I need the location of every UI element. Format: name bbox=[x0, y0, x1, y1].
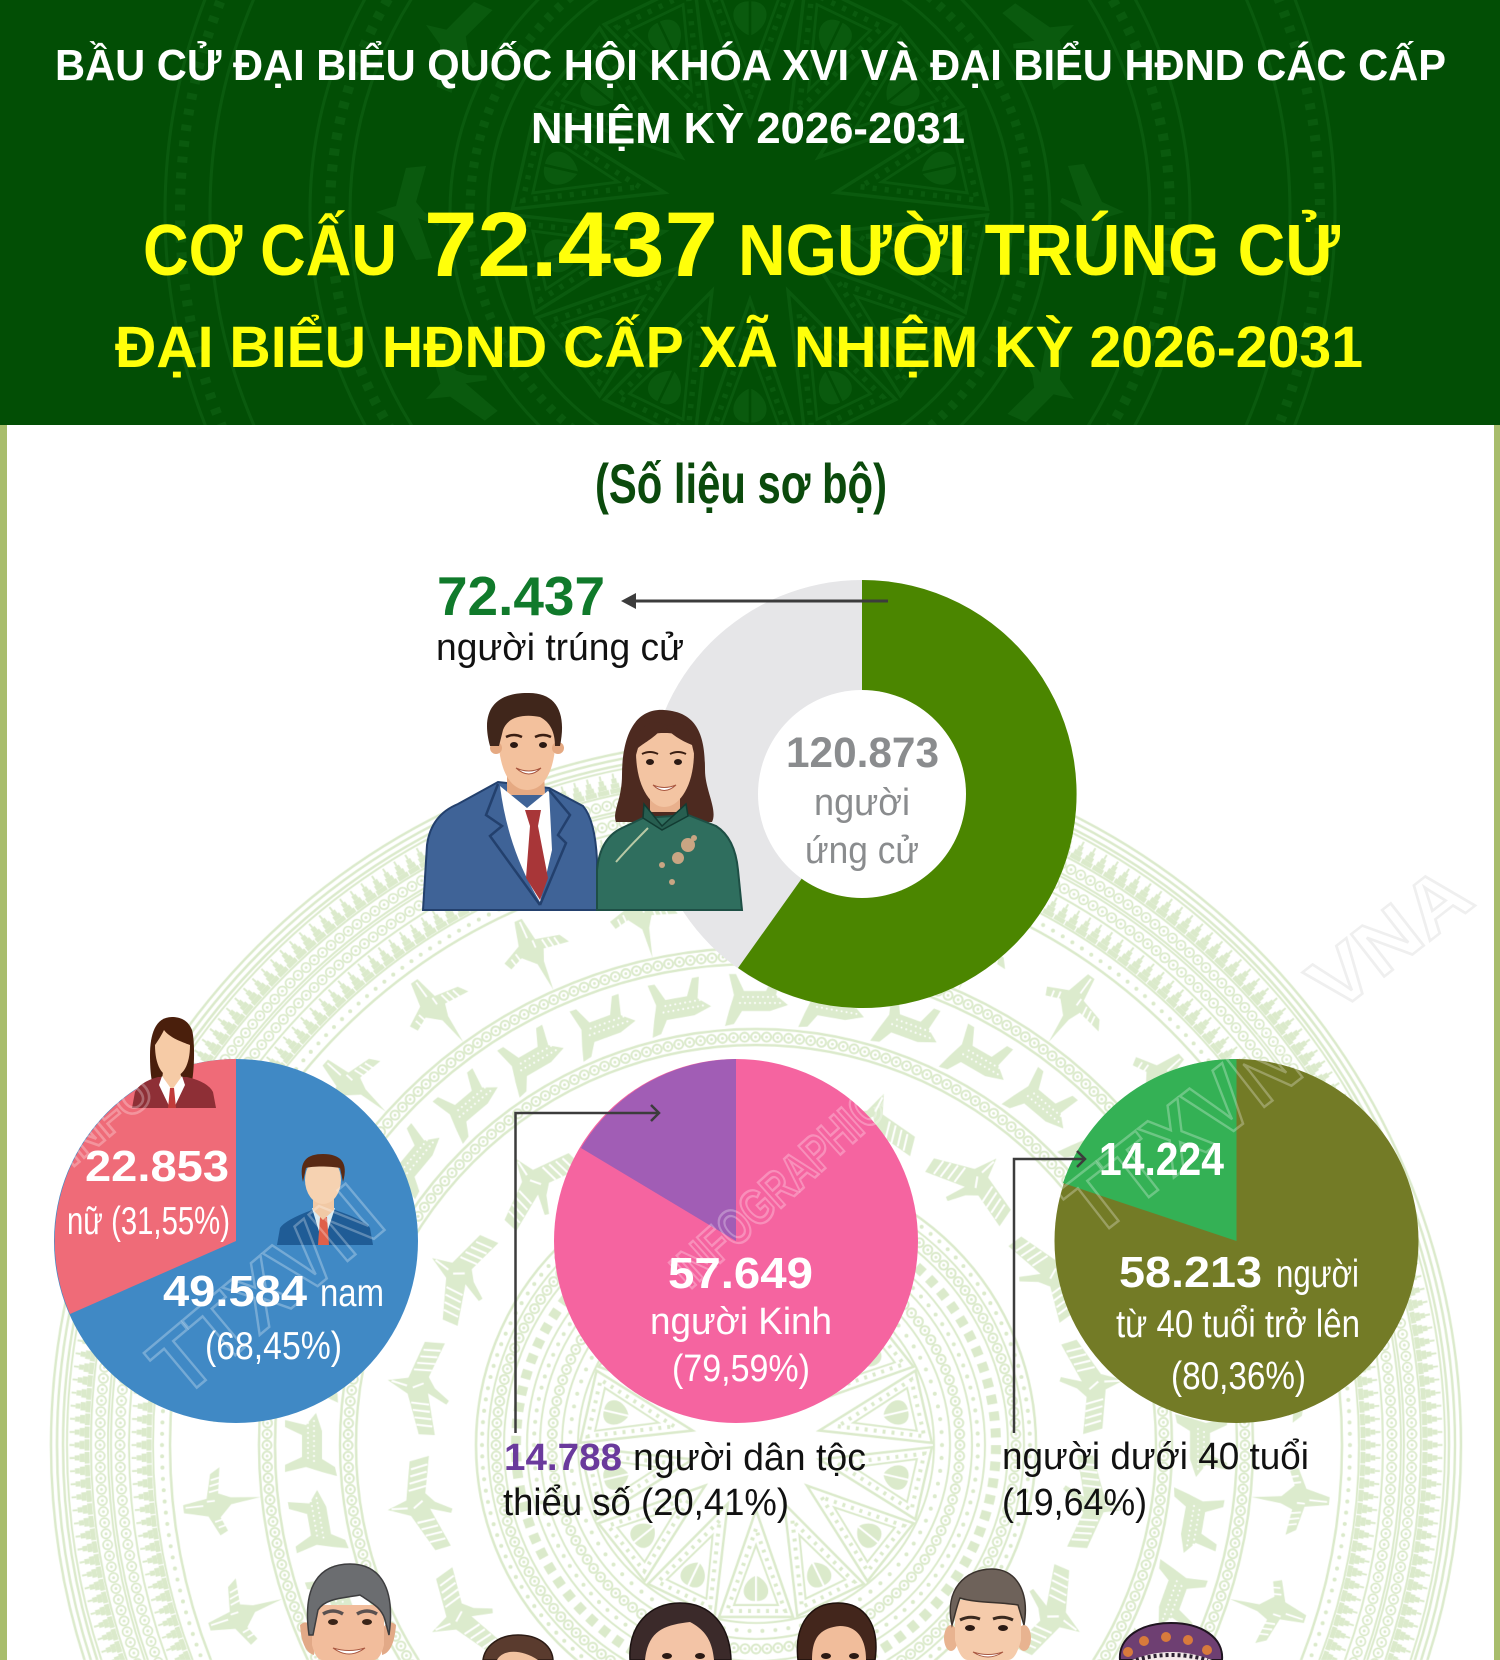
donut centre label: 120.873 bbox=[786, 729, 939, 777]
subtitle: preliminary data: (Số liệu sơ bộ) bbox=[595, 452, 887, 515]
watermarks: VNA bbox=[1291, 848, 1487, 1028]
title second line: ĐẠI BIỂU HĐND CẤP XÃ NHIỆM KỲ 2026-2031 bbox=[115, 315, 1363, 380]
title main line: 72.437 bbox=[424, 194, 718, 296]
callout text: under 40: (19,64%) bbox=[1002, 1482, 1147, 1524]
pie label: Kinh: (79,59%) bbox=[672, 1348, 810, 1390]
donut centre label: ứng cử bbox=[805, 830, 919, 872]
donut centre label bbox=[786, 729, 939, 872]
callout text: ethnic minority bbox=[503, 1437, 866, 1524]
title main line: NGƯỜI TRÚNG CỬ bbox=[738, 210, 1340, 291]
watermarks bbox=[47, 848, 1487, 1415]
callout text: under 40 bbox=[1002, 1436, 1309, 1524]
donut centre label: người bbox=[814, 782, 910, 824]
header panel bbox=[0, 0, 1500, 425]
icon: woman bbox=[132, 1017, 216, 1108]
pie label: 40 and over: người bbox=[1276, 1253, 1359, 1296]
watermarks: TTXVN bbox=[1045, 1011, 1318, 1255]
callout text: ethnic minority: 14.788 bbox=[504, 1437, 622, 1479]
title main line: CƠ CẤU bbox=[143, 210, 397, 291]
pie label: Kinh: 57.649 bbox=[668, 1249, 813, 1298]
older man bbox=[300, 1564, 396, 1660]
pie chart: ethnicity bbox=[554, 1059, 918, 1423]
pie chart: gender bbox=[54, 1017, 418, 1423]
label: 72,437 elected bbox=[436, 565, 684, 669]
young man bbox=[944, 1569, 1031, 1660]
header line 2: NHIỆM KỲ 2026-2031 bbox=[531, 103, 965, 153]
label: 72,437 elected: người trúng cử bbox=[436, 627, 684, 669]
woman left bbox=[483, 1635, 553, 1660]
pie label: under 40: 14.224 bbox=[1099, 1133, 1224, 1185]
pie label: women bbox=[67, 1142, 230, 1243]
pie label: women: nữ (31,55%) bbox=[67, 1200, 230, 1243]
background: bronze drum pattern bbox=[7, 425, 1494, 1660]
watermarks: INFOGRAPHICS bbox=[660, 1063, 913, 1298]
woman in ao dai bbox=[597, 710, 742, 910]
pie chart: age bbox=[1054, 1059, 1418, 1423]
pie label: 40 and over bbox=[1116, 1248, 1360, 1398]
callout text: under 40: người dưới 40 tuổi bbox=[1002, 1436, 1309, 1478]
ethnic woman with headdress bbox=[1120, 1623, 1222, 1660]
callout arrow: under 40 bbox=[1014, 1151, 1085, 1433]
pie label: men bbox=[163, 1267, 384, 1368]
woman centre bbox=[630, 1603, 731, 1660]
watermarks: TTXVN bbox=[131, 1165, 401, 1415]
icon: man bbox=[277, 1154, 373, 1245]
callout arrow: ethnic minority bbox=[516, 1105, 659, 1433]
man bbox=[423, 693, 597, 910]
watermarks: INFO bbox=[47, 1067, 163, 1176]
pie label: men: (68,45%) bbox=[205, 1325, 342, 1368]
illustration: elected man and woman bbox=[423, 693, 742, 910]
arrow: donut to elected label bbox=[621, 593, 888, 609]
pie label: men: 49.584 bbox=[163, 1267, 308, 1316]
pie label: women: 22.853 bbox=[85, 1142, 229, 1191]
pie label: men: nam bbox=[320, 1272, 384, 1315]
man centre bbox=[797, 1603, 876, 1660]
pie label: 40 and over: từ 40 tuổi trở lên bbox=[1116, 1303, 1360, 1346]
callout text: ethnic minority: người dân tộc bbox=[633, 1437, 866, 1479]
title main line bbox=[143, 194, 1340, 296]
side borders bbox=[0, 425, 1500, 1660]
pie label: Kinh bbox=[650, 1249, 832, 1390]
label: 72,437 elected: 72.437 bbox=[437, 565, 605, 627]
callout text: ethnic minority: thiểu số (20,41%) bbox=[503, 1482, 789, 1524]
pie label: 40 and over: 58.213 bbox=[1119, 1248, 1262, 1297]
pie label: Kinh: người Kinh bbox=[650, 1301, 832, 1343]
header line 1: BẦU CỬ ĐẠI BIỂU QUỐC HỘI KHÓA XVI VÀ ĐẠI BIỂU HĐND CÁC CẤP bbox=[55, 39, 1446, 90]
illustration: group of delegates bbox=[300, 1564, 1222, 1660]
donut chart: candidates vs elected bbox=[648, 580, 1077, 1008]
pie label: 40 and over: (80,36%) bbox=[1171, 1355, 1306, 1398]
